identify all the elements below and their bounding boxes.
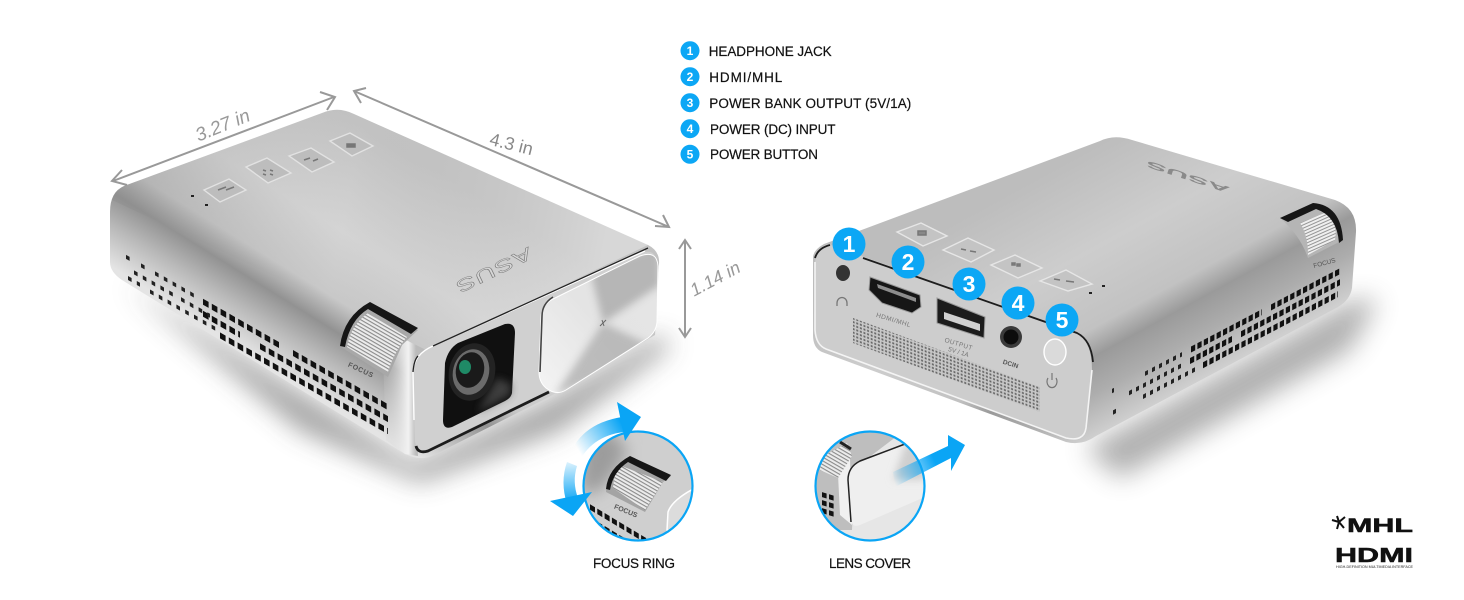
inset ring — [816, 432, 924, 540]
logo: mhl — [1332, 516, 1414, 537]
badge 5 — [1046, 304, 1078, 336]
inset photo — [815, 430, 925, 542]
top face shading — [112, 110, 648, 347]
inset photo: FOCUS — [613, 504, 639, 520]
arrow — [893, 435, 965, 487]
legend item 1: 1 — [687, 44, 694, 58]
legend item 4: 4 — [687, 122, 694, 136]
legend item 4: POWER (DC) INPUT — [710, 122, 836, 137]
hdmi port — [869, 277, 921, 313]
cover brushed reflection — [555, 254, 658, 392]
button glyphs — [218, 144, 355, 190]
badge 1 — [832, 228, 866, 260]
lens cover — [539, 254, 658, 393]
logo: hdmi: HDMI — [1335, 545, 1413, 567]
housing reflection — [478, 378, 511, 412]
power icon — [1047, 373, 1057, 388]
dimension: height label: 1.14 in — [687, 257, 744, 300]
badge 2 — [892, 246, 924, 278]
panel top edge — [815, 245, 1093, 362]
lens housing — [443, 324, 515, 428]
power button — [1044, 339, 1066, 365]
focus slot — [1280, 203, 1343, 243]
asus logo: ASUS — [452, 243, 535, 297]
headphone jack — [836, 265, 850, 281]
button glyphs — [918, 231, 1074, 282]
front corner highlight — [382, 328, 426, 456]
caption: lens cover: LENS COVER — [829, 556, 911, 571]
legend item 5: POWER BUTTON — [710, 147, 818, 162]
button 2 — [246, 158, 291, 183]
usb inner — [944, 312, 980, 331]
status leds — [191, 196, 208, 205]
button 3 — [289, 148, 334, 172]
badge 4: 4 — [1012, 290, 1025, 316]
vents — [126, 257, 388, 431]
cover shadow edge — [540, 297, 553, 372]
badge 3 — [952, 268, 986, 300]
button c — [991, 255, 1042, 278]
focus recess — [1280, 203, 1343, 258]
legend item 1 — [680, 41, 832, 60]
button 4 — [330, 133, 373, 156]
lower arc band — [564, 462, 578, 504]
body — [813, 137, 1356, 443]
focus label: FOCUS — [1313, 257, 1337, 270]
badge 2: 2 — [902, 249, 914, 275]
right projector — [813, 137, 1356, 443]
output rating: 5V / 1A — [947, 346, 970, 359]
button a — [897, 223, 947, 246]
button 1 — [204, 179, 246, 202]
focus recess — [341, 303, 418, 377]
left projector — [110, 110, 660, 458]
dimension: length label: 4.3 in — [488, 129, 535, 159]
asus logo: ASUS — [1145, 159, 1231, 195]
speaker grille — [853, 318, 1040, 412]
hdmi label: HDMI/MHL — [875, 312, 912, 329]
upper arc band — [567, 417, 624, 466]
inset photo — [584, 432, 692, 540]
status leds — [1089, 286, 1105, 293]
dc jack — [1000, 326, 1022, 348]
usb port — [937, 298, 985, 338]
cover centre mark — [600, 320, 606, 326]
inset: lens cover — [815, 430, 965, 542]
logo: hdmi — [1335, 545, 1414, 569]
focus slot — [340, 302, 418, 347]
legend item 4 — [680, 119, 836, 138]
dimension: height arrow — [679, 240, 691, 337]
arrow head down — [550, 492, 592, 516]
rim dark accent — [413, 248, 648, 372]
inset ring — [584, 432, 692, 540]
focus label: FOCUS — [347, 362, 375, 380]
front rim — [413, 251, 645, 420]
lens — [443, 338, 501, 406]
legend item 3: POWER BANK OUTPUT (5V/1A) — [709, 96, 911, 111]
dimension: width arrow — [112, 92, 335, 185]
badge 4 — [1002, 286, 1034, 320]
vents — [1112, 271, 1341, 413]
dcin label: DCIN — [1002, 359, 1019, 370]
button b — [943, 238, 994, 262]
shadow: right projector — [1085, 300, 1378, 478]
legend — [680, 41, 911, 164]
button d — [1040, 270, 1092, 291]
caption: focus ring: FOCUS RING — [593, 556, 675, 571]
legend item 2: 2 — [687, 70, 694, 84]
cover outline — [539, 254, 658, 393]
badge 3: 3 — [963, 271, 975, 297]
front panel — [413, 252, 656, 451]
dimension: width label: 3.27 in — [193, 105, 253, 146]
bottom gap — [416, 392, 549, 452]
logo: hdmi: HIGH-DEFINITION MULTIMEDIA INTERFACE — [1336, 565, 1414, 569]
inset: focus ring — [550, 402, 694, 542]
panel rim — [815, 262, 1092, 439]
output label: OUTPUT — [943, 337, 973, 352]
dimension: length arrow — [354, 88, 669, 227]
legend item 2: HDMI/MHL — [709, 70, 783, 85]
badge 1: 1 — [843, 231, 856, 257]
hdmi inner — [877, 284, 916, 302]
logo: mhl: MHL — [1347, 516, 1414, 537]
focus wheel — [1300, 212, 1336, 255]
legend item 1: HEADPHONE JACK — [709, 44, 832, 59]
headphone icon — [837, 298, 847, 306]
front panel — [815, 244, 1092, 439]
legend item 3 — [680, 93, 911, 112]
legend item 2 — [680, 67, 783, 86]
legend item 5: 5 — [687, 148, 694, 162]
focus wheel — [347, 313, 407, 372]
arrow head up — [617, 402, 641, 441]
legend item 5 — [680, 145, 818, 164]
legend item 3: 3 — [687, 96, 694, 110]
shadow: left projector — [125, 283, 672, 482]
badge 5: 5 — [1056, 307, 1069, 333]
body — [110, 110, 659, 458]
